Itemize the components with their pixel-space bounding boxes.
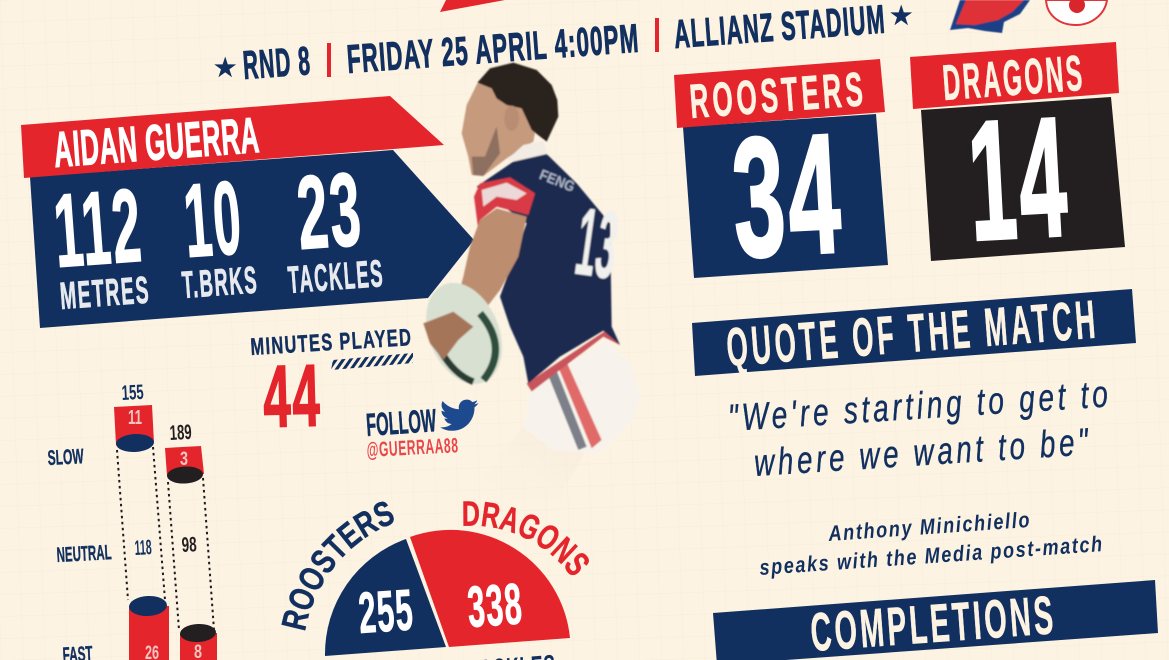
- top red ribbon: [440, 0, 505, 12]
- Dragons sector: [410, 530, 570, 647]
- red name banner: [21, 96, 444, 178]
- shorts stripes: [547, 367, 587, 450]
- Roosters neutral value: 118: [134, 536, 152, 560]
- Dragons fast cylinder: [180, 623, 217, 660]
- player photo illustration: 13: [570, 187, 624, 300]
- jersey: [477, 154, 620, 383]
- quote attribution detail: speaks with the Media post-match: [759, 531, 1105, 580]
- hair: [477, 63, 558, 142]
- slow label: SLOW: [47, 445, 84, 470]
- Dragons slow cylinder: [165, 446, 204, 484]
- header divider one: [327, 43, 331, 77]
- date and time: FRIDAY 25 APRIL 4:00PM: [345, 17, 641, 82]
- icon: Roosters logo: [950, 0, 1030, 33]
- player name: AIDAN GUERRA: [52, 107, 261, 178]
- minutes label: MINUTES PLAYED: [250, 324, 413, 361]
- dotted cylinder guides: [117, 447, 214, 630]
- black score box: [921, 97, 1125, 261]
- Dragons slow cylinder: 3: [180, 449, 188, 470]
- twitter handle: @GUERRAA88: [366, 434, 459, 462]
- icon: left star: ★: [214, 54, 237, 82]
- icon: right star: ★: [890, 2, 913, 30]
- neck and face: [462, 83, 540, 176]
- Roosters tackles value: 255: [356, 577, 416, 646]
- Roosters sector: [325, 539, 446, 656]
- collar: [507, 141, 548, 163]
- Dragons banner: [910, 42, 1119, 109]
- Roosters banner: [674, 59, 885, 128]
- panel: player stats: T.BRKS: [181, 260, 259, 307]
- panel: completions heading: [713, 580, 1158, 660]
- quote banner: [692, 289, 1136, 376]
- header divider two: [655, 18, 659, 52]
- hand: [423, 312, 473, 360]
- panel: quote of the match: [692, 289, 1136, 580]
- Dragons curved label: DRAGONS: [463, 501, 589, 576]
- jersey sponsor: FENG: [537, 167, 577, 196]
- ear: [504, 106, 519, 131]
- navy stats shape: [30, 150, 474, 328]
- shorts: [523, 340, 641, 453]
- curve guide paths: [305, 524, 391, 632]
- follow label: FOLLOW: [365, 402, 438, 443]
- Roosters slow total: 155: [121, 381, 144, 405]
- completions banner: [713, 580, 1158, 660]
- Roosters name: ROOSTERS: [688, 63, 868, 129]
- Dragons neutral value: 98: [181, 533, 197, 557]
- Dragons score value: 14: [964, 82, 1074, 277]
- metres label: METRES: [59, 269, 151, 318]
- icon: twitter bird: [440, 400, 478, 431]
- Roosters fast cylinder: [129, 595, 169, 660]
- chart: tackles semicircle: [281, 501, 589, 660]
- panel: Roosters score: [674, 59, 888, 294]
- icon: Dragons logo: [1046, 0, 1107, 25]
- player photo illustration: [412, 63, 641, 500]
- panel: player stats: [21, 96, 474, 328]
- Roosters slow cylinder: [114, 405, 154, 453]
- tackles value: 23: [293, 151, 367, 272]
- match details header: [214, 0, 913, 88]
- Roosters score value: 34: [728, 98, 848, 294]
- neutral label: NEUTRAL: [56, 541, 112, 567]
- panel: minutes played: [250, 324, 413, 446]
- quote attribution name: Anthony Minichiello: [827, 507, 1032, 546]
- round label: RND 8: [241, 39, 312, 88]
- ball: [412, 271, 516, 395]
- panel: player stats: TACKLES: [287, 253, 385, 302]
- sleeve: [474, 177, 535, 230]
- chart: run speed cylinders: [47, 381, 217, 660]
- faded leg: [467, 413, 587, 500]
- minutes value: 44: [262, 346, 322, 446]
- Dragons tackles value: 338: [465, 571, 525, 640]
- Roosters slow cylinder: 11: [128, 407, 142, 429]
- Roosters curved label: ROOSTERS: [281, 502, 394, 630]
- arm: [453, 208, 527, 327]
- waistband: [527, 330, 620, 392]
- Dragons slow total: 189: [169, 421, 192, 445]
- panel: Dragons score: [910, 42, 1125, 277]
- metres value: 112: [50, 168, 146, 290]
- hatch bar: [331, 353, 413, 370]
- panel: twitter follow: [365, 400, 478, 462]
- tackle breaks value: 10: [180, 160, 247, 280]
- navy score box: [683, 114, 888, 278]
